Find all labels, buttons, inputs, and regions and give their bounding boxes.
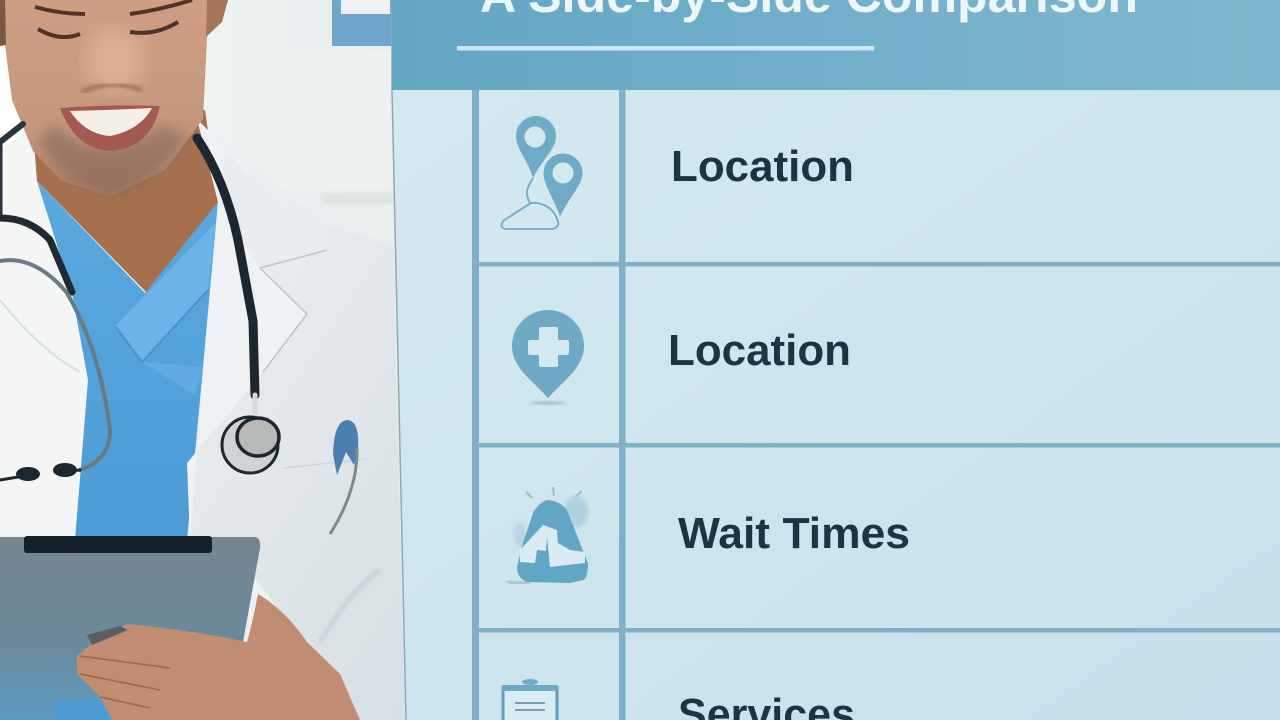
row 1: location pins icon xyxy=(502,116,583,229)
table grid xyxy=(472,90,1280,720)
row 2 label: Location xyxy=(668,326,851,375)
row 2: medical pin icon xyxy=(512,310,584,405)
face xyxy=(0,0,228,197)
pen in pocket xyxy=(283,420,367,534)
scrubs xyxy=(37,181,218,540)
row 4: services clipboard icon xyxy=(502,679,558,720)
photo: smiling doctor with tablet xyxy=(0,0,405,720)
stethoscope xyxy=(0,124,279,481)
row 3: wait times icon xyxy=(505,487,588,584)
neck xyxy=(33,110,218,293)
panel background xyxy=(392,88,1280,720)
hand xyxy=(77,594,360,720)
header band xyxy=(392,0,1280,90)
title underline xyxy=(457,46,874,50)
panel edge xyxy=(392,0,406,720)
row 3 label: Wait Times xyxy=(678,509,910,558)
right lapel xyxy=(187,119,327,540)
comparison table panel xyxy=(392,0,1280,720)
lab coat xyxy=(0,119,405,720)
row 1 label: Location xyxy=(671,142,854,191)
tablet xyxy=(0,536,260,720)
clinic background xyxy=(0,0,400,720)
